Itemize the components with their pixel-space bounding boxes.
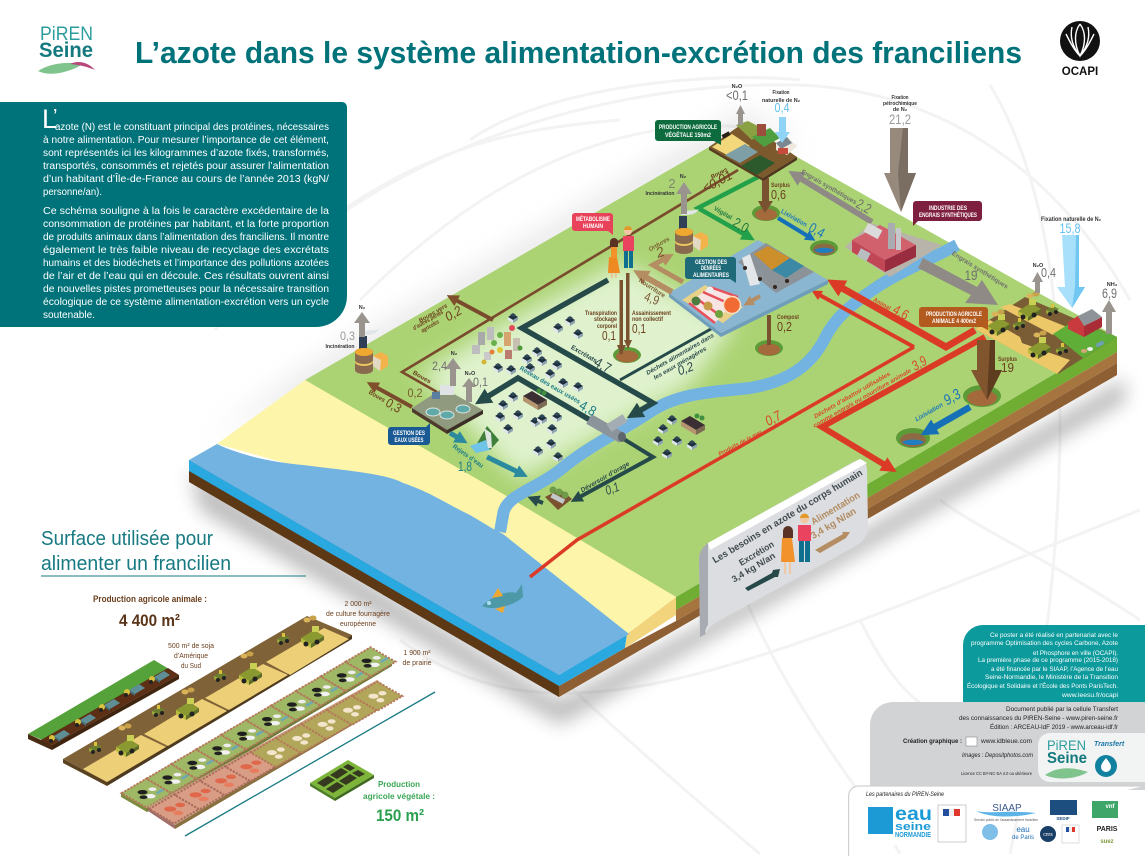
hole: surplus plant [752, 205, 780, 221]
logo: autres partenaires: eau [1016, 825, 1030, 834]
logo: eau Seine Normandie: seine [895, 821, 931, 833]
values: surplus 19: Surplus [998, 357, 1018, 363]
flow label: Produits de la mer 0,7: 0,7 [762, 407, 785, 429]
flow label: Excrétats 4,7 [569, 344, 615, 376]
values: plant farm N2O: N₂O [732, 84, 743, 90]
panel: introduction: sont représentés ici les kilogrammes d’azote fixés, transformés, [43, 148, 329, 159]
sign: nitrogen needs: Alimentation [809, 490, 862, 528]
hole: surplus 19 [963, 385, 1001, 407]
flow label: Réseau 4,8: 4,8 [577, 397, 600, 419]
logo: autres partenaires: vnf [1106, 804, 1116, 810]
values: plant farm N2O: <0,1 [726, 87, 748, 103]
flow label: Déchets d'abattoir 3,9: comme engrais ou nourriture animale [813, 368, 913, 429]
logo: autres partenaires: SEDIF [1056, 816, 1070, 821]
panel: introduction: soutenable. [43, 310, 95, 321]
arrow: ordures [653, 257, 683, 282]
label: gestion eaux usées: GESTION DES [393, 430, 425, 437]
flow: long boues line [372, 170, 738, 407]
values: fixation 21,2: pétrochimique [883, 101, 917, 107]
flow label: Ordures 2 [648, 236, 672, 261]
panel: introduction: ’ [53, 106, 57, 128]
values: transpiration: 0,1 [602, 328, 616, 343]
flow label: Boues vers autres pertes: d’autres pertes [412, 310, 445, 332]
logo: ministère [938, 805, 966, 842]
values: compost: 0,2 [777, 319, 792, 334]
side: green strip right [676, 337, 1117, 610]
flow label: Excrétats 4,7: Excrétats [569, 344, 598, 365]
background pattern [215, 78, 1140, 854]
logo card: PIREN Seine Transfert [1038, 733, 1145, 782]
panel: introduction: également le très faible niveau de recyclage des excrétats [43, 245, 329, 256]
arrow: food internal [748, 296, 760, 303]
flow label: Déchets d'abattoir 3,9: 3,9 [909, 352, 930, 374]
values: incineration: N₂ [680, 174, 687, 180]
values: fixation 15,8: Fixation naturelle de N₂ [1041, 217, 1101, 223]
sign: nitrogen needs: Les besoins en azote du corps humain [711, 468, 865, 566]
food management platform [669, 240, 828, 337]
panel: introduction: L [42, 104, 57, 134]
values: transpiration [585, 311, 618, 343]
isometric platform [189, 122, 1117, 697]
market buildings [738, 243, 814, 293]
sign man [798, 514, 811, 562]
flow: excrétats network [482, 280, 718, 503]
logo: autres partenaires [982, 800, 1118, 845]
text: 1900 m2 prairie [402, 648, 432, 667]
flow label: Boues 0,3: 0,3 [383, 395, 404, 416]
values: compost: Compost [777, 315, 799, 321]
water surface [189, 444, 629, 675]
label: gestion des denrées: GESTION DES [695, 259, 727, 266]
side: water left [189, 460, 559, 686]
flow label: Déversoir 0,1: Déversoir d’orage [580, 460, 631, 494]
arrow: incineration left N2 [354, 312, 370, 337]
flow label: Végétal 2,0: Végétal [712, 205, 733, 222]
title: L’azote dans le système alimentation-excrétion des franciliens [135, 35, 1022, 70]
logo: autres partenaires: suez [1100, 839, 1114, 845]
values: plant farm N2O [726, 84, 748, 103]
text: 500 m2 soja: 500 m² de soja [168, 641, 215, 650]
text: 500 m2 soja: d’Amérique [174, 651, 208, 660]
arrow: surplus 0,6 [758, 178, 773, 213]
city buildings [472, 325, 522, 364]
arrow: natural fixation 0,4 [775, 117, 790, 143]
fish [482, 584, 523, 613]
panel: OCAPI credit: Seine-Normandie, le Ministère de la Transition [985, 674, 1118, 681]
values: surplus 0,6: Surplus [771, 183, 791, 189]
flow label: Boues <0,01: Boues [710, 167, 729, 181]
heading: production animale: 4 400 m² [119, 611, 180, 630]
flow label: Boues 0,2: Boues [411, 370, 432, 386]
logo: PIREN Seine: Seine [39, 39, 93, 62]
flow label: Boues vers autres pertes: agricoles [420, 319, 441, 334]
panel: partners: Les partenaires du PIREN-Seine [866, 792, 945, 798]
label: gestion eaux usées: EAUX USÉES [394, 435, 424, 444]
flow label: Nourriture 4,9: 4,9 [642, 289, 661, 308]
flow label: Boues vers autres pertes: Boues vers [418, 303, 449, 324]
flow label: Animal 4,6 [872, 297, 912, 323]
values: wastewater gases: N₂ [451, 351, 458, 357]
panel: introduction: écologique de ce système alimentation-excrétion vers un cycle [43, 297, 329, 308]
green surface [305, 122, 1117, 597]
label: gestion des denrées: ALIMENTAIRES [693, 272, 729, 279]
values: fixation 15,8 [1041, 217, 1101, 236]
values: assainissement: non collectif [632, 317, 664, 323]
values: fixation 21,2: 21,2 [889, 111, 911, 127]
logo: PIREN Seine: PiREN [40, 24, 93, 45]
panel: credits grey: Licence CC BY-NC-SA 4.0 ou ultérieure [961, 771, 1032, 776]
fertilizer industry [845, 223, 942, 277]
barn [1068, 309, 1102, 337]
arrows: water discharge [450, 433, 522, 474]
flow label: Déchets alimentaires: les eaux ménagères [653, 346, 709, 381]
values: incineration: Incinération [646, 191, 675, 197]
logo card: PIREN Seine Transfert: Transfert [1094, 741, 1125, 748]
values: wastewater gases: 0,1 [473, 375, 488, 389]
panel: introduction [0, 102, 347, 327]
hydro hill [470, 426, 499, 453]
flow label: Engrais 2,2: 2,2 [854, 195, 875, 217]
side: water right [559, 634, 627, 686]
arrow: wastewater N2O [462, 378, 476, 402]
houses: right of river [653, 414, 705, 459]
values: assainissement: 0,1 [632, 321, 646, 336]
values: incineration: 2 [668, 176, 676, 191]
label: production animale: PRODUCTION AGRICOLE [926, 311, 982, 318]
text: production végétale: Production [378, 779, 420, 789]
text: 2000 m2 fourrage: 2 000 m² [344, 599, 372, 608]
panel: partners [849, 786, 1144, 856]
label: production végétale: VÉGÉTALE 150m2 [665, 130, 711, 139]
values: compost [777, 315, 799, 334]
flow: vegetal arrow [698, 177, 758, 237]
arrow: lixiviation 0,4 [778, 218, 811, 238]
flow label: Boues 0,3 [367, 390, 404, 416]
flow label: Lixiviation 9,3 [914, 386, 964, 423]
panel: introduction: consommation de protéines par habitant, et la forte proportion [43, 219, 329, 230]
flow label: Réseau 4,8 [518, 365, 600, 419]
panel: introduction: de nouvelles pistes prometteuses pour la nécessaire transition [43, 284, 329, 295]
arrow: petrochemical fixation 21,2 [884, 128, 916, 212]
panel: OCAPI credit: programme Optimisation des cycles Carbone, Azote [971, 640, 1118, 647]
values: wastewater gases: 2,4 [432, 359, 447, 373]
flow label: Excrétats 4,7: 4,7 [592, 354, 615, 376]
values: fixation 0,4 [762, 90, 801, 115]
panel: introduction: transportés, consommés et rejetés pour assurer l’alimentation [43, 161, 329, 172]
values: left incineration: 0,3 [340, 329, 355, 343]
flow label: Déchets d'abattoir 3,9: Déchets d’abattoir utilisables [813, 371, 892, 420]
flow label: Boues vers autres pertes: 0,2 [442, 302, 465, 324]
values: wastewater gases [432, 351, 488, 389]
values: fixation 15,8: 15,8 [1060, 220, 1081, 236]
text: 500 m2 soja [168, 641, 215, 670]
plant farm [709, 121, 797, 181]
strip: prairie vaches [121, 647, 396, 812]
sign: nitrogen needs: 3,4 kg N/an [809, 506, 859, 542]
food table [682, 285, 743, 323]
flow label: Engrais 19: Engrais synthétiques [950, 250, 1009, 291]
storm outlet [545, 486, 572, 510]
flow label: Déversoir 0,1: 0,1 [603, 479, 621, 498]
strip: fourrage [63, 616, 352, 786]
flow label: Produits de la mer 0,7: Produits de la mer [718, 430, 764, 458]
values: transpiration: Transpiration [585, 311, 617, 317]
river [500, 245, 957, 532]
flow label: Ordures 2: Ordures [648, 236, 672, 253]
hole: lixiviation 0,4 [810, 240, 838, 256]
values: animal farm N2O: N₂O [1033, 263, 1044, 269]
flow label: Engrais 19: 19 [964, 267, 978, 283]
incinerator: food waste [675, 209, 708, 254]
panel: credits grey: des connaissances du PIREN-Seine - www.piren-seine.fr [959, 715, 1119, 722]
hole: compost [755, 340, 783, 356]
logo: SIAAP: Service public de l’assainissement francilien [974, 818, 1038, 822]
hole: lixiviation 9,3 [896, 428, 930, 448]
logo: eau Seine Normandie [868, 804, 932, 839]
text: 2000 m2 fourrage: européenne [340, 619, 376, 628]
flow label: Boues 0,2: 0,2 [408, 386, 423, 400]
sand surface [217, 380, 676, 634]
logo: OCAPI: OCAPI [1062, 66, 1098, 78]
arrow: NH3 [1102, 300, 1116, 334]
flow label: Boues 0,2 [408, 370, 432, 400]
panel: OCAPI credit: La première phase de ce programme (2015-2018) [978, 657, 1118, 664]
ground shadow [189, 378, 1125, 725]
flow label: Nourriture 4,9: Nourriture [637, 277, 667, 300]
panel: OCAPI credit: Ce poster a été réalisé en partenariat avec le [990, 632, 1118, 639]
values: fixation 0,4: 0,4 [774, 100, 790, 115]
panel: OCAPI credit: Écologique et Solidaire et l’École des Ponts ParisTech. [967, 681, 1118, 690]
flow label: Produits de la mer 0,7 [718, 407, 785, 458]
values: left incineration: Incinération [326, 344, 355, 350]
strip: soja [28, 660, 179, 750]
arrow: incineration N2 [676, 182, 692, 214]
side: soil right [559, 363, 1117, 697]
panel: introduction: à notre alimentation. Pour mesurer l’importance de cet élément, [43, 135, 329, 146]
people: woman [608, 238, 620, 278]
label: production animale [919, 307, 988, 330]
flow label: Lixiviation 0,4 [779, 208, 828, 241]
arrow: surplus 19 [971, 340, 1002, 400]
label: gestion des denrées: DENRÉES [701, 263, 721, 272]
panel: credits grey: Édition : ARCEAU-IdF 2019 - www.arceau-idf.fr [990, 722, 1119, 731]
values: incineration [646, 174, 687, 197]
arrow: natural fixation 15,8 [1057, 235, 1085, 308]
heading: production animale [93, 594, 207, 630]
incinerator: sludge [355, 329, 388, 374]
label: métabolisme humain: MÉTABOLISME [576, 214, 610, 223]
text: 2000 m2 fourrage: de culture fourragère [326, 609, 390, 618]
label: gestion des denrées [685, 257, 736, 283]
sign: nitrogen needs: Excrétion [737, 539, 776, 568]
logo: eau Seine Normandie: NORMANDIE [895, 832, 931, 839]
flow label: Lixiviation 0,4: Lixiviation [779, 208, 808, 229]
flow label: Ordures 2: 2 [653, 243, 667, 261]
pipe [589, 418, 626, 442]
values: assainissement: Assainissement [632, 311, 671, 317]
flow label: Lixiviation 0,4: 0,4 [806, 219, 828, 241]
values: fixation 21,2 [883, 95, 917, 127]
panel: introduction: azote (N) est le constituant principal des protéines, nécessaires [55, 122, 329, 133]
arrow: lixiviation 9,3 [928, 407, 970, 431]
back glow shadow [210, 112, 802, 440]
values: fixation 0,4: naturelle de N₂ [762, 98, 801, 104]
arrow: wastewater N2 [445, 358, 461, 386]
plot: production végétale [310, 760, 374, 801]
flow label: Végétal 2,0: 2,0 [730, 214, 752, 236]
text: 2000 m2 fourrage [326, 599, 390, 628]
sign: nitrogen needs [699, 459, 868, 637]
separator line [185, 692, 435, 836]
text: 1900 m2 prairie: 1 900 m² [404, 648, 431, 657]
panel: OCAPI credit: a été financée par le SIAAP, l’Agence de l’eau [991, 666, 1118, 673]
arrow: nourriture [640, 274, 672, 292]
panel: credits grey [870, 702, 1145, 790]
values: wastewater gases: N₂O [465, 371, 476, 377]
logo: autres partenaires: cnrs [1043, 832, 1053, 838]
panel: credits grey: Images : Depositphotos.com [962, 752, 1033, 759]
side: light soil right [676, 352, 1117, 621]
arrows: human vertical [617, 273, 632, 355]
panel: credits grey: www.idbleue.com [980, 738, 1032, 745]
label: industrie: INDUSTRIE DES [929, 205, 967, 212]
text: production végétale: 150 m² [376, 807, 424, 825]
values: surplus 0,6: 0,6 [771, 187, 786, 202]
logo card: PIREN Seine Transfert: Seine [1047, 750, 1087, 767]
panel: OCAPI credit [963, 625, 1145, 702]
panel: introduction: humains et des biodéchets et l’importance des pollutions azotées [43, 258, 329, 269]
urban light zone [420, 262, 735, 480]
logo: OCAPI [1060, 21, 1100, 78]
panel: credits grey: Création graphique : [903, 738, 962, 745]
flow label: Engrais 2,2: Engrais synthétiques [800, 169, 858, 206]
logo: autres partenaires: de Paris [1012, 835, 1034, 841]
label: industrie [913, 201, 982, 226]
flow label: Rejets 1,8: 1,8 [458, 458, 472, 474]
houses: urban [493, 313, 583, 462]
sign woman [781, 526, 795, 574]
label: production végétale [655, 120, 721, 145]
heading: surface: alimenter un francilien [41, 553, 231, 575]
values: fixation 21,2: Fixation [892, 95, 909, 101]
label: industrie: ENGRAIS SYNTHÉTIQUES [919, 210, 977, 219]
panel: OCAPI credit: www.leesu.fr/ocapi [1061, 692, 1119, 699]
side: sand right [625, 597, 676, 648]
text: 500 m2 soja: du Sud [181, 661, 201, 670]
values: surplus 19: 19 [1001, 360, 1014, 375]
heading: production animale: Production agricole animale : [93, 594, 207, 604]
flow label: Lixiviation 9,3: Lixiviation [914, 402, 944, 423]
logo: autres partenaires: PARIS [1097, 826, 1118, 833]
flow label: Lixiviation 9,3: 9,3 [941, 386, 964, 409]
flow: red animal arrows [530, 284, 985, 577]
logo card: PIREN Seine Transfert: PiREN [1047, 737, 1086, 753]
values: left incineration: N₂ [359, 305, 366, 311]
values: transpiration: corporel [597, 324, 617, 330]
people: man [623, 226, 634, 268]
values: assainissement [632, 311, 671, 336]
panel: introduction: Ce schéma souligne à la fois le caractère excédentaire de la [43, 206, 329, 217]
logo: eau Seine Normandie: eau [895, 804, 932, 825]
label: métabolisme humain: HUMAIN [583, 223, 603, 230]
values: surplus 19 [998, 357, 1018, 375]
flow label: Végétal 2,0 [712, 205, 752, 236]
flow label: Animal 4,6: Animal [872, 297, 892, 312]
values: fixation 21,2: de N₂ [893, 107, 908, 113]
arrow: plant farm N2O [736, 105, 745, 125]
flow label: Déchets alimentaires: 0,2 [675, 358, 696, 378]
panel: introduction: de produits animaux dans l’alimentation des franciliens. Il montre [43, 232, 329, 243]
logo: SIAAP: SIAAP [992, 803, 1022, 814]
arrow: compost [767, 315, 771, 345]
arrow: fertilizer 19 [918, 258, 998, 305]
wastewater plant [412, 385, 483, 434]
logo: PIREN Seine [38, 24, 95, 74]
sign: nitrogen needs: 3,4 kg N/an [730, 551, 777, 584]
flow label: Déchets alimentaires: Déchets alimentaires dans [646, 333, 716, 377]
hole: human [613, 347, 641, 363]
values: left incineration [326, 305, 366, 350]
label: production animale: ANIMALE 4 400m2 [932, 318, 976, 325]
arrow: animal farm N2O [1032, 272, 1043, 293]
text: production végétale [363, 779, 435, 825]
label: métabolisme humain [572, 213, 613, 235]
text: 1900 m2 prairie: de prairie [402, 658, 432, 667]
flow label: Réseau 4,8: Réseau des eaux usées [518, 365, 582, 406]
label: gestion eaux usées [388, 423, 430, 445]
values: animal farm N2O [1033, 263, 1056, 280]
animal farm [975, 292, 1117, 374]
flow label: Rejets 1,8: Rejets d’eau [451, 443, 484, 470]
flow label: Boues <0,01: <0,01 [700, 167, 735, 196]
values: transpiration: stockage [594, 317, 618, 323]
heading: surface [41, 528, 306, 576]
logo: SIAAP [974, 803, 1038, 822]
values: fixation 0,4: Fixation [772, 90, 790, 96]
panel: introduction: de l’air et de l’eau qui en découle. Ces résultats ouvrent ainsi [43, 271, 329, 282]
flow label: Engrais 2,2 [800, 169, 875, 217]
panel: introduction: d’un habitant d’Île-de-France au cours de l’année 2013 (kgN/ [43, 172, 329, 185]
flow label: Boues vers autres pertes [412, 302, 465, 334]
values: NH3: 6,9 [1102, 285, 1117, 301]
panel: OCAPI credit: et Phosphore en ville (OCAPI). [1033, 650, 1118, 657]
panel: introduction: personne/an). [43, 187, 102, 198]
panel: credits grey: Document publié par la cellule Transfert [1006, 706, 1118, 713]
values: NH3: NH₃ [1107, 282, 1118, 288]
side: bottom soil left [189, 460, 559, 697]
flow label: Animal 4,6: 4,6 [890, 301, 912, 323]
strip: porcs et moutons [148, 680, 402, 829]
flow label: Boues 0,3: Boues [367, 390, 386, 404]
arrow: fertilizer 2,2 [795, 175, 872, 222]
heading: surface: Surface utilisée pour [41, 528, 213, 550]
text: production végétale: agricole végétale : [363, 791, 435, 801]
label: production végétale: PRODUCTION AGRICOLE [659, 124, 717, 131]
values: animal farm N2O: 0,4 [1041, 265, 1056, 280]
flow label: Déchets d'abattoir 3,9 [813, 352, 930, 429]
